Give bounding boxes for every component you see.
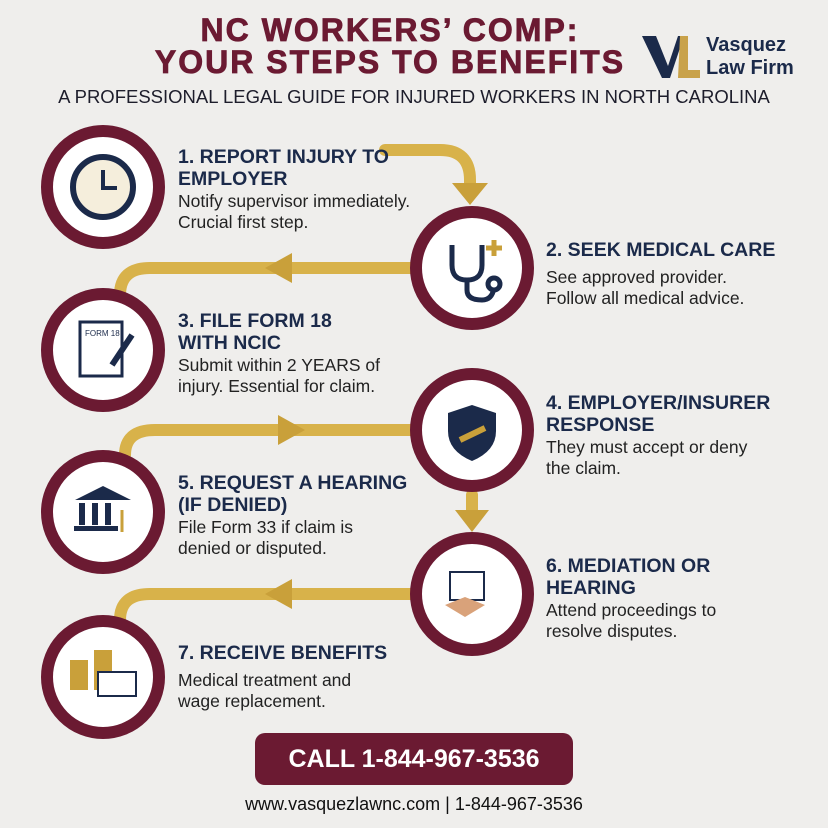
step 3: WITH NCIC (178, 332, 281, 354)
icon: handshake (445, 572, 485, 617)
icon: courthouse (74, 486, 131, 532)
icon: stethoscope (452, 240, 502, 300)
step 6: HEARING (546, 577, 636, 599)
step 1 (178, 146, 410, 232)
step 3: injury. Essential for claim. (178, 376, 375, 396)
step 1: 1. REPORT INJURY TO (178, 146, 389, 168)
step 7: Medical treatment and (178, 670, 351, 690)
icon: form: FORM 18 (85, 329, 120, 338)
icon: coins check (70, 650, 136, 696)
step 3: 3. FILE FORM 18 (178, 310, 332, 332)
icon: clock (73, 157, 133, 217)
step 4 (546, 392, 770, 478)
step 7: 7. RECEIVE BENEFITS (178, 642, 387, 664)
step 5: File Form 33 if claim is (178, 517, 353, 537)
step 5 (178, 472, 407, 558)
title: NC WORKERS’ COMP: (201, 12, 579, 48)
step 4: RESPONSE (546, 414, 654, 436)
icon: form (80, 322, 132, 376)
title: YOUR STEPS TO BENEFITS (155, 44, 625, 80)
call button (255, 733, 573, 785)
step 7: wage replacement. (178, 691, 326, 711)
step 7 (178, 642, 387, 711)
step 1: EMPLOYER (178, 168, 287, 190)
step 2: Follow all medical advice. (546, 288, 744, 308)
step 3 (178, 310, 380, 396)
subtitle: A PROFESSIONAL LEGAL GUIDE FOR INJURED WORKERS IN NORTH CAROLINA (58, 86, 770, 107)
step 5: denied or disputed. (178, 538, 327, 558)
step 4: 4. EMPLOYER/INSURER (546, 392, 770, 414)
step 6: Attend proceedings to (546, 600, 716, 620)
logo: Vasquez (706, 34, 786, 56)
title (154, 12, 625, 80)
step 2: 2. SEEK MEDICAL CARE (546, 239, 775, 261)
step 1: Crucial first step. (178, 212, 308, 232)
step 1: Notify supervisor immediately. (178, 191, 410, 211)
step 6 (546, 555, 716, 641)
logo (642, 34, 794, 79)
step 4: the claim. (546, 458, 621, 478)
step 6: 6. MEDIATION OR (546, 555, 710, 577)
call button: CALL 1-844-967-3536 (288, 745, 540, 773)
step 4: They must accept or deny (546, 437, 747, 457)
icon: shield gavel (448, 405, 496, 461)
step 2: See approved provider. (546, 267, 727, 287)
step 2 (546, 239, 775, 308)
step 6: resolve disputes. (546, 621, 677, 641)
step 3: Submit within 2 YEARS of (178, 355, 380, 375)
step 5: 5. REQUEST A HEARING (178, 472, 407, 494)
footer: www.vasquezlawnc.com | 1-844-967-3536 (245, 794, 583, 814)
logo: Law Firm (706, 57, 794, 79)
step 5: (IF DENIED) (178, 494, 287, 516)
